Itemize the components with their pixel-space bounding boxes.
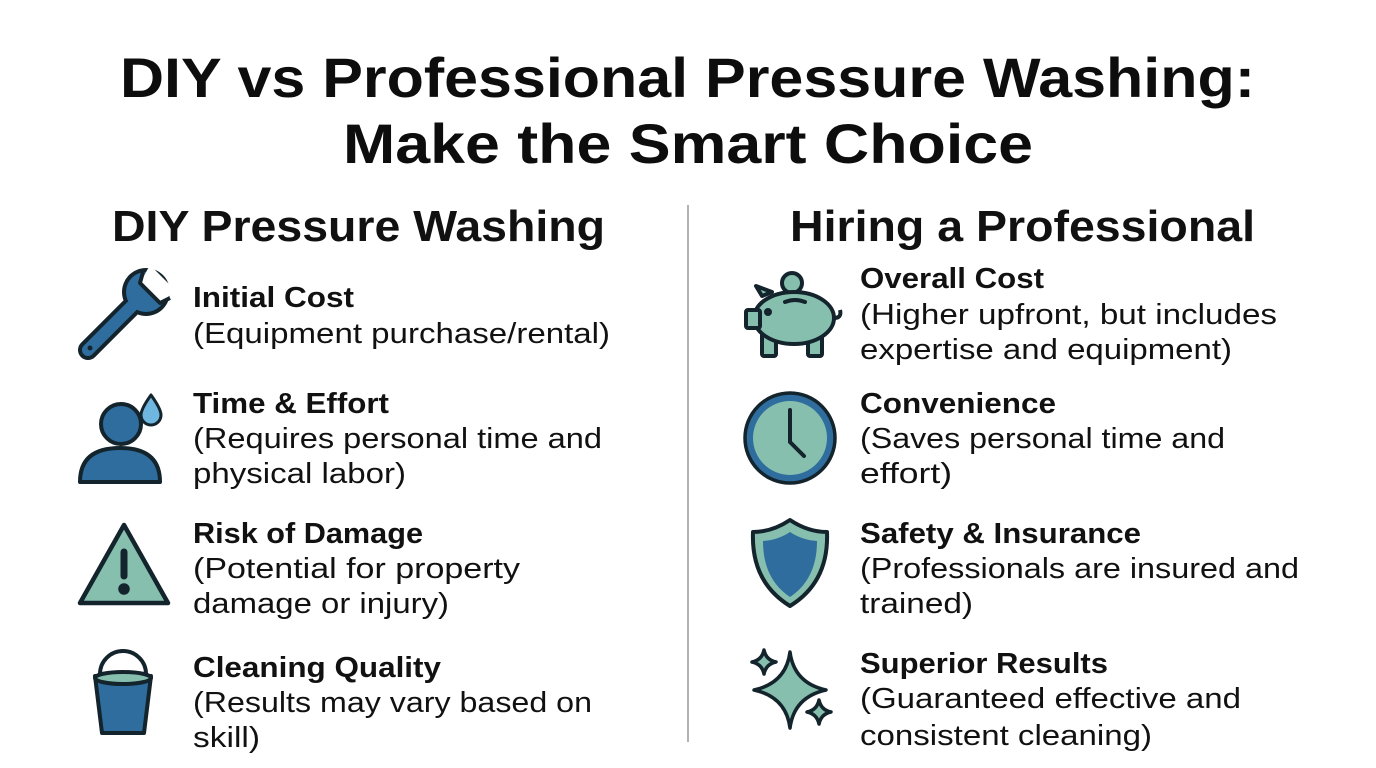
- item: Risk of Damage: [193, 518, 521, 620]
- item: Safety & Insurance: trained): [860, 588, 973, 620]
- icon: sparkles: [752, 650, 831, 728]
- item: Convenience: effort): [860, 458, 952, 490]
- icon: warning: [80, 525, 168, 603]
- item: Safety & Insurance: Safety & Insurance: [860, 518, 1141, 550]
- item: Convenience: [860, 388, 1225, 490]
- item: Safety & Insurance: (Professionals are insured and: [860, 553, 1299, 585]
- icon: piggy bank: [746, 273, 840, 356]
- icon: bucket: [95, 651, 151, 733]
- panel: Professional: [745, 202, 1299, 752]
- item: Superior Results: [860, 648, 1241, 752]
- title: [120, 46, 1255, 175]
- item: Cleaning Quality: skill): [193, 722, 260, 754]
- item: Initial Cost: Initial Cost: [193, 282, 354, 314]
- icon: shield: [753, 520, 827, 606]
- item: Overall Cost: [860, 263, 1277, 366]
- panel: DIY: [80, 202, 610, 754]
- item: Convenience: Convenience: [860, 388, 1056, 420]
- item: Superior Results: Superior Results: [860, 648, 1108, 680]
- icon: clock: [745, 393, 835, 483]
- item: Convenience: (Saves personal time and: [860, 423, 1225, 455]
- item: Overall Cost: expertise and equipment): [860, 334, 1232, 366]
- item: Safety & Insurance: [860, 518, 1299, 620]
- item: Cleaning Quality: (Results may vary based on: [193, 687, 592, 719]
- item: Time & Effort: (Requires personal time and: [193, 423, 602, 455]
- heading: DIY Pressure Washing: DIY Pressure Washing: [112, 202, 605, 251]
- item: Overall Cost: Overall Cost: [860, 263, 1044, 295]
- item: Initial Cost: [193, 282, 610, 350]
- icon: wrench: [88, 265, 176, 350]
- heading: Hiring a Professional: Hiring a Professional: [790, 202, 1255, 251]
- item: Superior Results: (Guaranteed effective and: [860, 683, 1241, 715]
- item: Cleaning Quality: [193, 652, 592, 754]
- title: DIY vs Professional Pressure Washing:: [120, 46, 1255, 109]
- item: Initial Cost: (Equipment purchase/rental): [193, 318, 610, 350]
- item: Overall Cost: (Higher upfront, but includes: [860, 299, 1277, 331]
- item: Risk of Damage: Risk of Damage: [193, 518, 423, 550]
- item: Risk of Damage: damage or injury): [193, 588, 449, 620]
- title: Make the Smart Choice: [343, 112, 1033, 175]
- item: Time & Effort: [193, 388, 602, 490]
- item: Time & Effort: Time & Effort: [193, 388, 389, 420]
- item: Risk of Damage: (Potential for property: [193, 553, 521, 585]
- icon: person with drop: [80, 395, 161, 482]
- item: Time & Effort: physical labor): [193, 458, 406, 490]
- item: Superior Results: consistent cleaning): [860, 720, 1152, 752]
- item: Cleaning Quality: Cleaning Quality: [193, 652, 441, 684]
